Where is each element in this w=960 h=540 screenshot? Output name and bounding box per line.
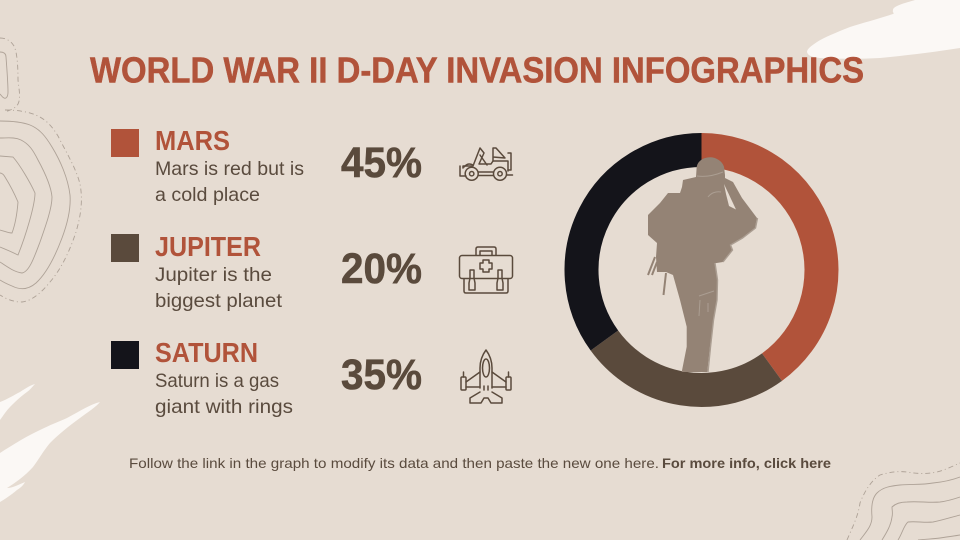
footer note: Follow the link in the graph to modify its data and then paste the new one here. bbox=[129, 455, 659, 471]
text: Mars description: a cold place bbox=[155, 184, 260, 206]
soldier silhouette bbox=[648, 157, 758, 372]
backpack straps bbox=[648, 257, 666, 295]
donut chart bbox=[582, 150, 821, 390]
gap between raised arm and shoulder bbox=[724, 184, 736, 210]
highlight edges bbox=[708, 218, 758, 372]
text: Jupiter description: Jupiter is the bbox=[155, 264, 272, 286]
swatch: Jupiter bbox=[111, 234, 139, 262]
swatch: Mars bbox=[111, 129, 139, 157]
legend item: Saturn bbox=[111, 337, 511, 418]
topographic contours bottom right bbox=[847, 463, 960, 540]
footer note: For more info, click here bbox=[662, 455, 831, 471]
value: 35%: 35% bbox=[341, 351, 422, 399]
segment: Jupiter bbox=[604, 340, 772, 390]
value: 20%: 20% bbox=[341, 245, 422, 293]
title: WORLD WAR II D-DAY INVASION INFOGRAPHICS bbox=[90, 50, 864, 90]
text: Saturn description: Saturn is a gas bbox=[155, 370, 279, 392]
topographic contours left bbox=[0, 38, 81, 302]
white brush stroke top right bbox=[807, 0, 960, 59]
text: Mars description: Mars is red but is bbox=[155, 158, 304, 180]
legend item: Mars bbox=[111, 125, 512, 206]
segment: Saturn bbox=[582, 150, 702, 340]
heading: Mars: MARS bbox=[155, 125, 230, 156]
icon: medical briefcase bbox=[460, 247, 512, 293]
swatch: Saturn bbox=[111, 341, 139, 369]
value: 45%: 45% bbox=[341, 139, 422, 187]
heading: Jupiter: JUPITER bbox=[155, 231, 261, 262]
heading: Saturn: SATURN bbox=[155, 337, 258, 368]
icon: jeep bbox=[460, 148, 512, 180]
icon: fighter jet bbox=[461, 350, 511, 403]
segment: Mars bbox=[702, 150, 821, 367]
text: Jupiter description: biggest planet bbox=[155, 290, 283, 312]
text: Saturn description: giant with rings bbox=[155, 396, 293, 418]
legend item: Jupiter bbox=[111, 231, 512, 312]
white brush strokes bottom left bbox=[0, 384, 100, 502]
